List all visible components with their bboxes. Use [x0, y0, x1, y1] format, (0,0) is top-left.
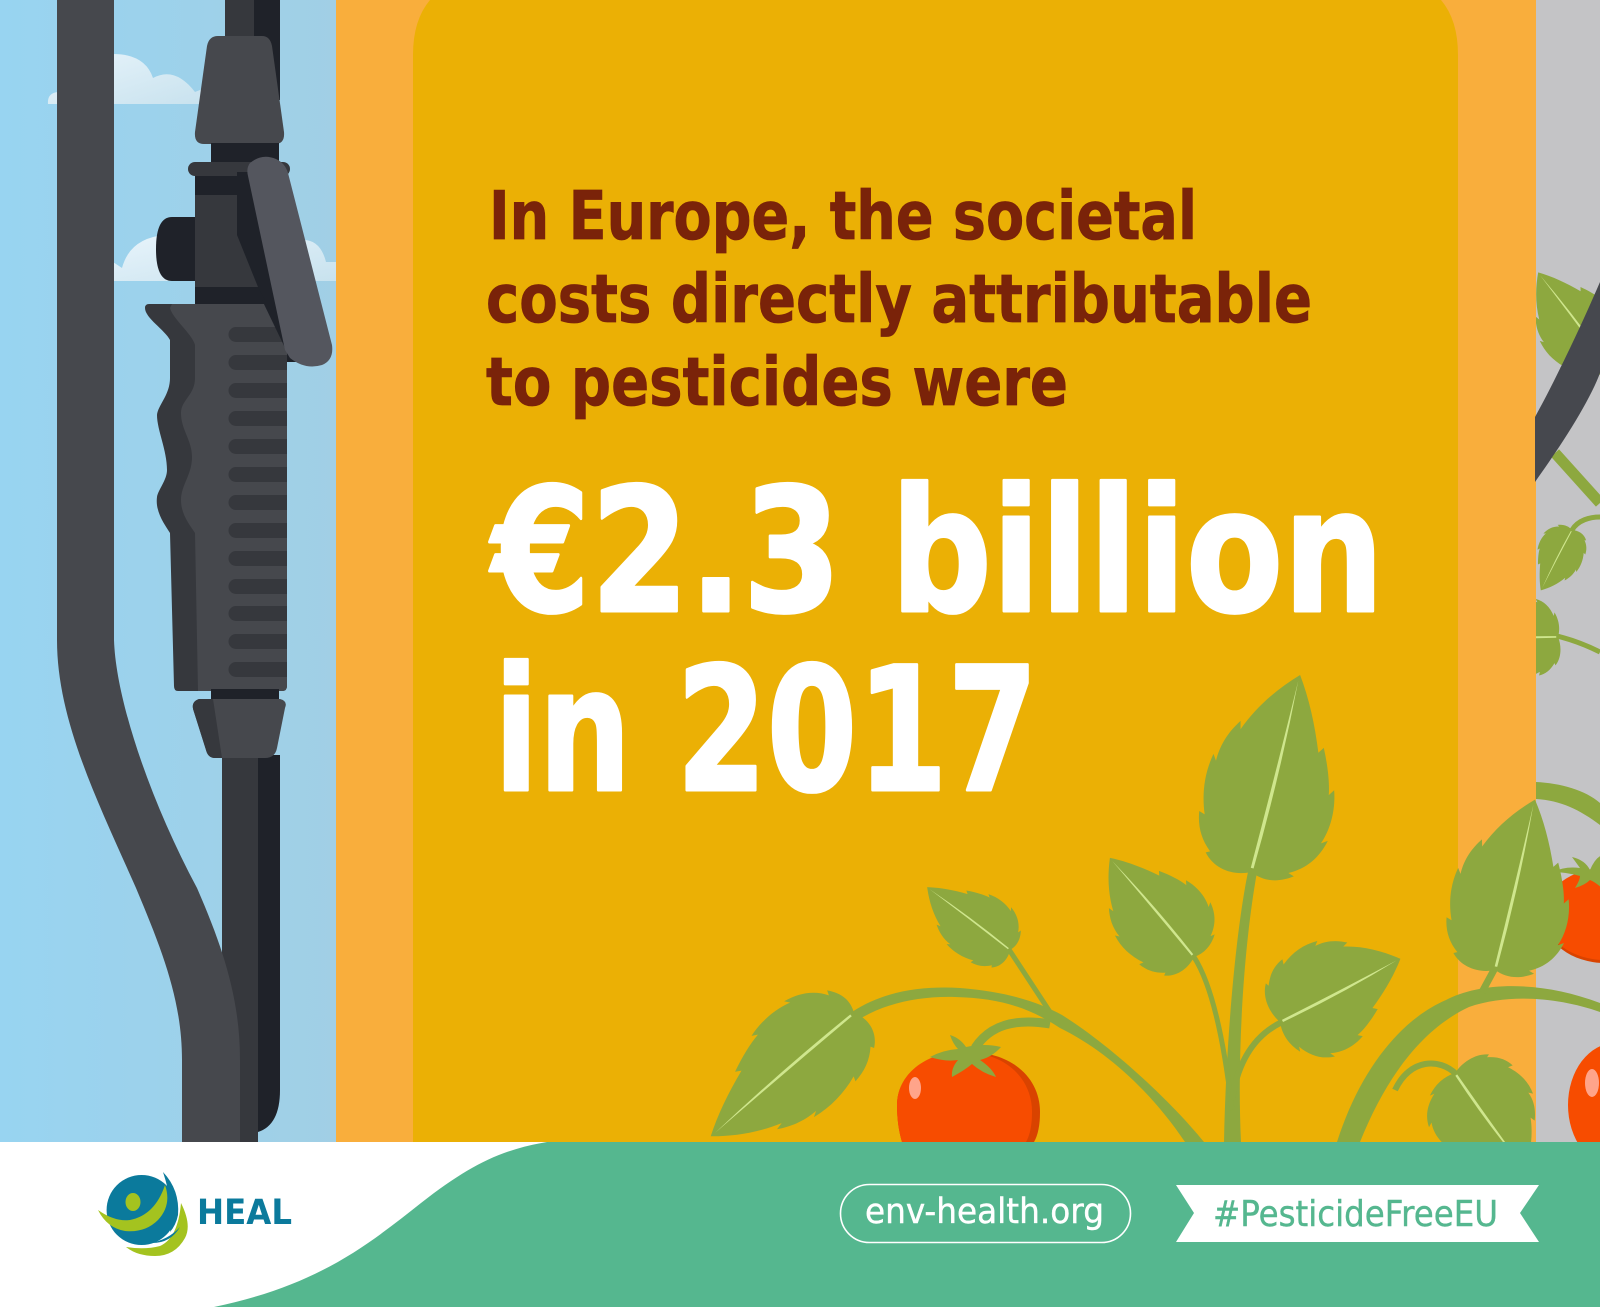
icon: spray lance [145, 0, 332, 1142]
grip ribs [229, 327, 287, 677]
text block: headline figure [489, 451, 1384, 831]
website pill: env-health.org [865, 1192, 1104, 1232]
hashtag ribbon [1176, 1185, 1539, 1242]
knob [156, 217, 196, 281]
trigger shadow [262, 300, 302, 364]
logo: HEAL [98, 1172, 292, 1256]
neck [211, 143, 279, 167]
leaves [675, 659, 1594, 1201]
stems [852, 872, 1600, 1142]
icon: clouds [48, 54, 336, 281]
website pill [840, 1184, 1130, 1242]
text block: headline figure: €2.3 billion [489, 451, 1384, 652]
flange [188, 162, 290, 176]
panel: orange band [336, 0, 1536, 1142]
icon: hose left [57, 0, 240, 1142]
text block: intro sentence [486, 177, 1312, 421]
tomato right lower [1568, 1046, 1600, 1142]
hashtag ribbon: #PesticideFreeEU [1213, 1194, 1498, 1235]
nozzle cap [195, 36, 284, 144]
panel: sky background [0, 0, 337, 1142]
trigger lever [247, 157, 332, 366]
logo: HEAL: HEAL [197, 1193, 292, 1233]
text block: intro sentence: to pesticides were [486, 343, 1068, 421]
panel: footer white band [0, 1142, 1600, 1307]
icon: tomato plant [675, 248, 1600, 1201]
panel: yellow text panel [413, 0, 1458, 1142]
pipe lower [222, 755, 280, 1142]
text block: headline figure: in 2017 [494, 630, 1038, 831]
tomato centre [897, 1035, 1040, 1142]
text block: intro sentence: costs directly attributable [486, 260, 1312, 338]
hose on right edge [1535, 282, 1600, 482]
valve body [195, 176, 267, 305]
lower collar [211, 689, 279, 701]
pipe upper [225, 0, 280, 100]
far-right stems and tomatoes [1536, 272, 1600, 825]
text block: intro sentence: In Europe, the societal [489, 177, 1197, 255]
lower nut [193, 699, 286, 758]
panel: grey background right [1536, 0, 1600, 1142]
panel: footer green wave [214, 1142, 1600, 1307]
tomato right upper [1558, 856, 1600, 963]
grip [145, 304, 287, 691]
